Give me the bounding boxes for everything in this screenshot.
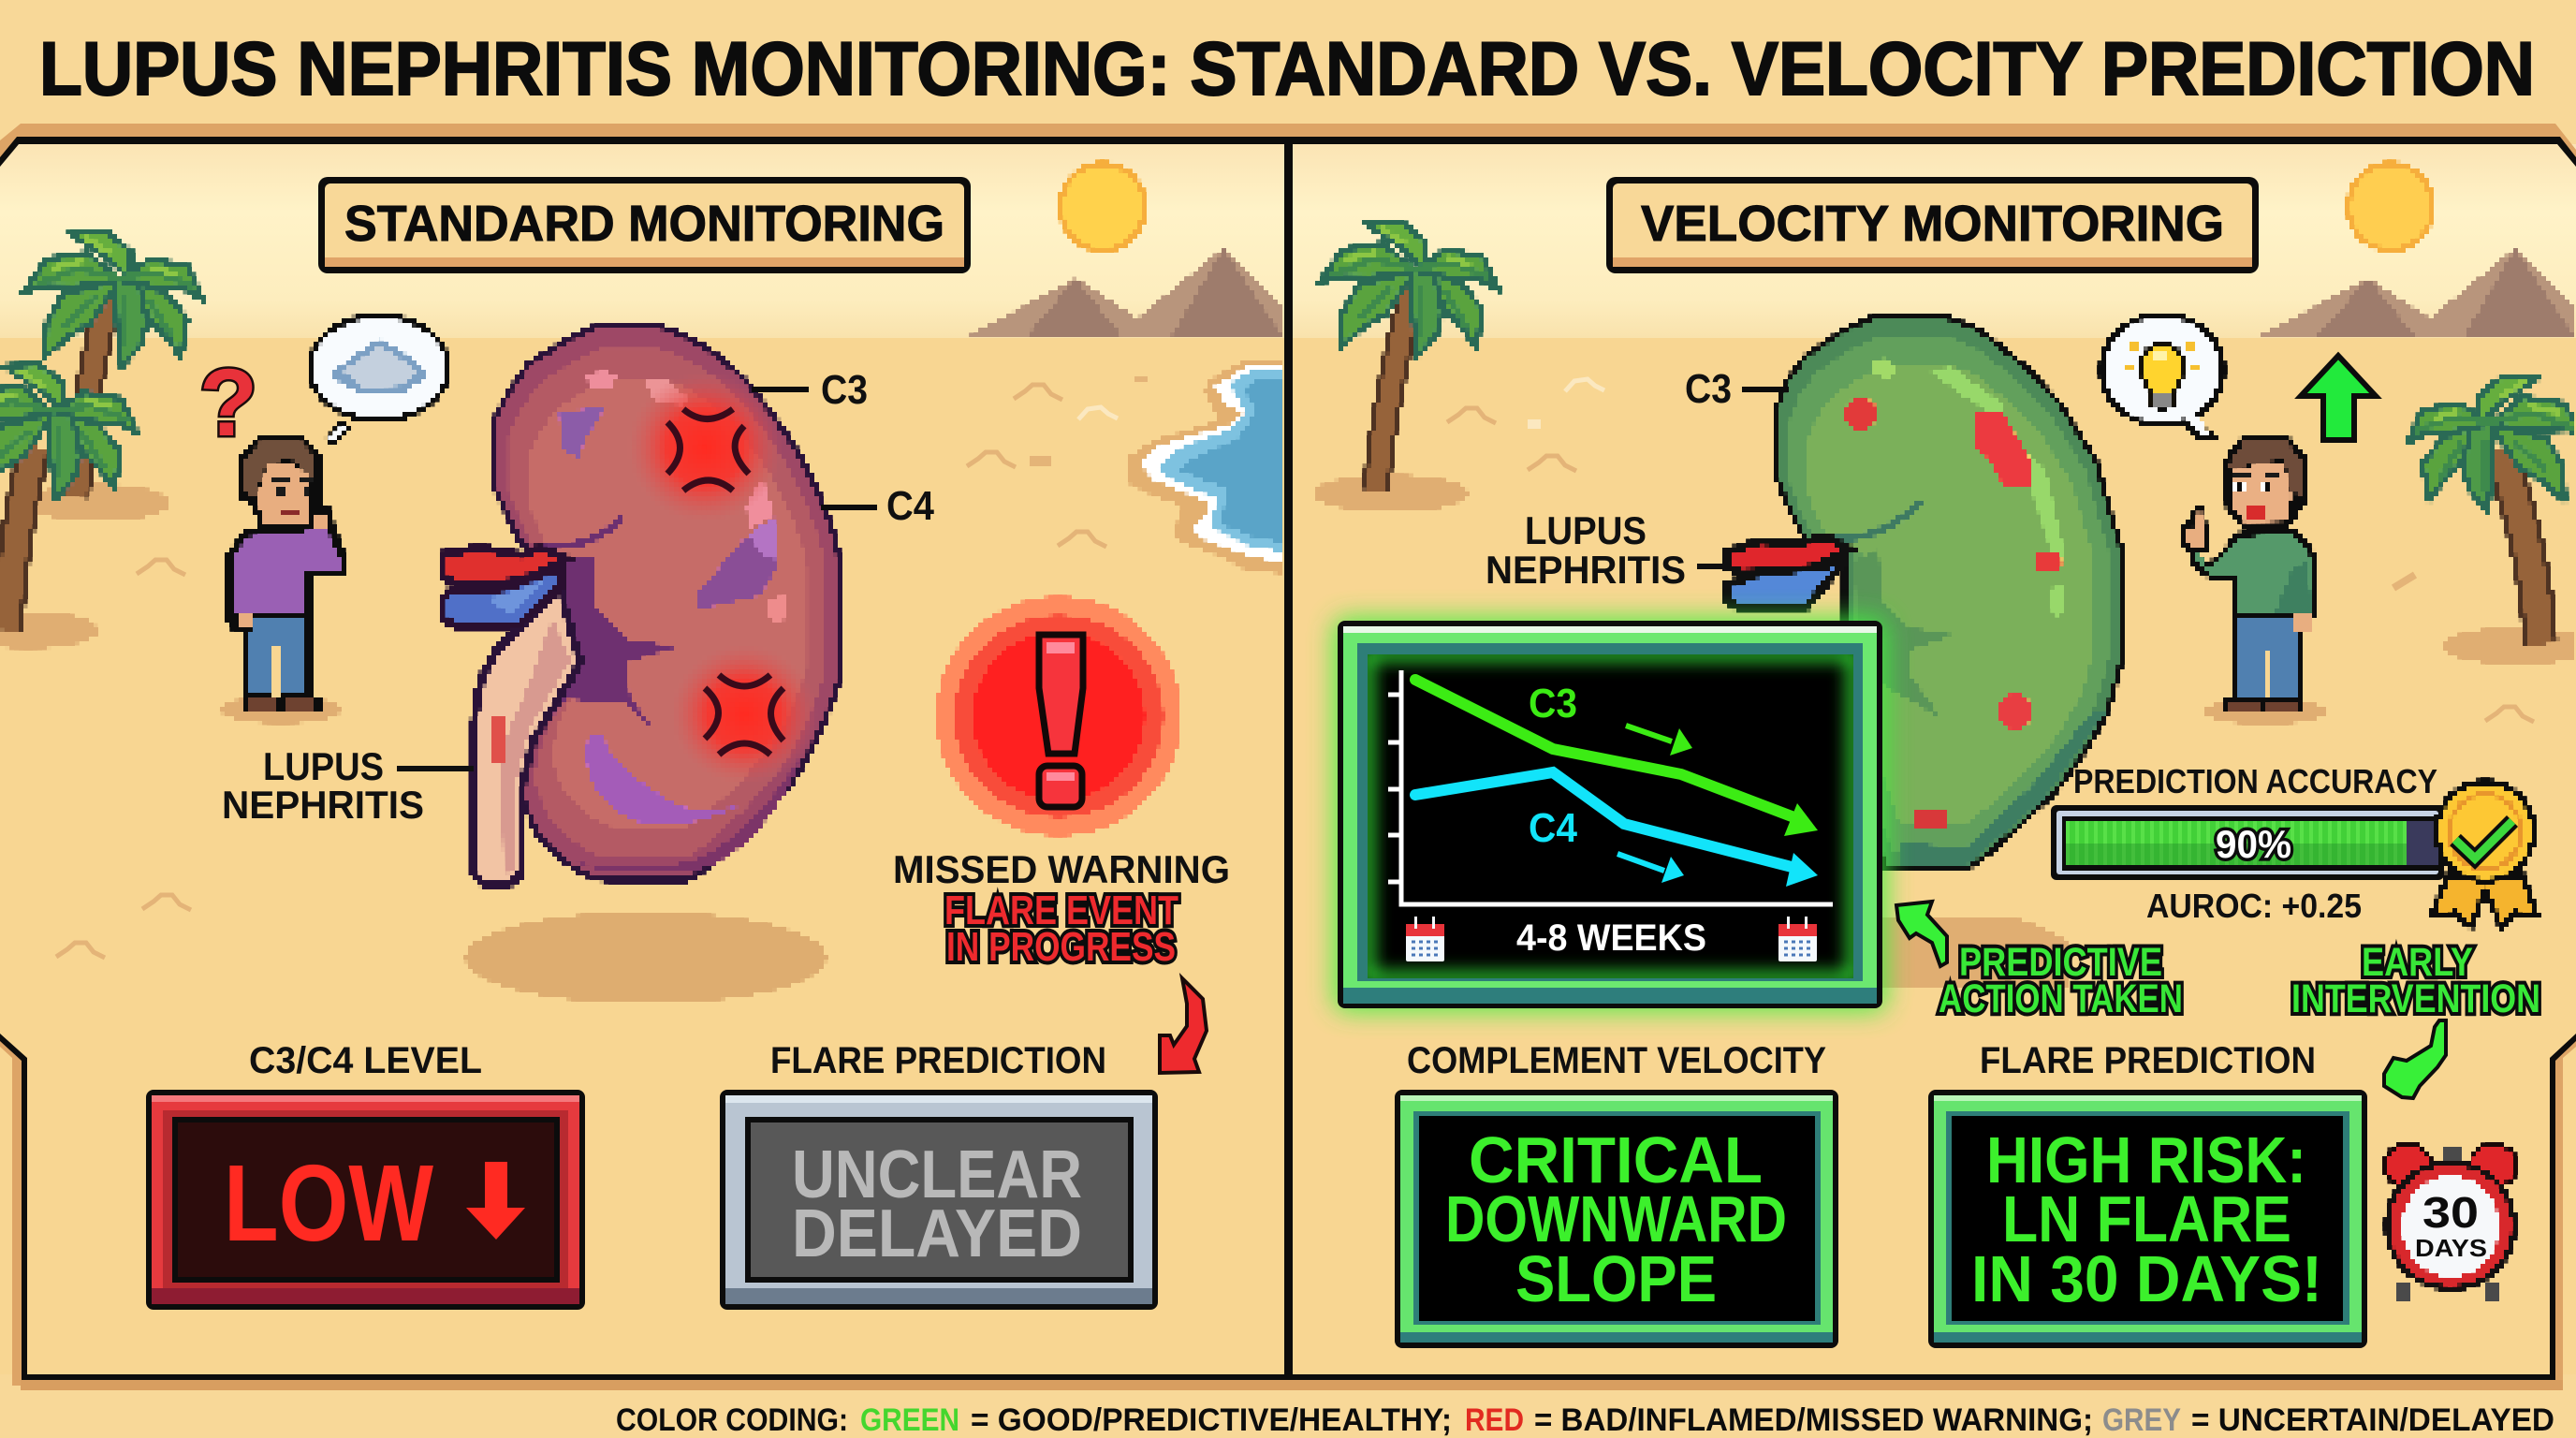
legend: color coding: GREY (2102, 1402, 2181, 1438)
status box: critical slope (1395, 1090, 1838, 1348)
kidney body (496, 330, 836, 877)
inflamed spot lower (671, 645, 817, 784)
callout: early intervention: EARLY (2362, 940, 2473, 985)
label: C3 (1685, 366, 1789, 412)
thought bubble (307, 313, 451, 446)
ground: velocity panel (1293, 338, 2576, 1374)
kidney shadow (465, 912, 827, 1004)
sky: velocity panel (1293, 144, 2576, 338)
label: C4 (821, 483, 934, 529)
callout: predictive action taken: PREDICTIVE (1959, 940, 2162, 985)
crease (1853, 548, 1954, 719)
vessels (443, 548, 568, 585)
icon: anger marks lower (705, 675, 783, 755)
icon: calendar start (1406, 917, 1444, 961)
purple crescent (586, 735, 739, 826)
kidney shadow (1881, 917, 2071, 988)
lesions (1844, 398, 1878, 430)
vessels (1727, 536, 1851, 573)
label: C3: C3 (821, 367, 868, 413)
status box: unclear (720, 1090, 1158, 1310)
heading: flare prediction: FLARE PREDICTION (1980, 1040, 2316, 1081)
prediction accuracy: PREDICTION ACCURACY (2073, 762, 2437, 800)
heading: complement velocity: COMPLEMENT VELOCITY (1407, 1040, 1826, 1081)
icon: warning (936, 596, 1181, 836)
icon: medal (2432, 779, 2537, 927)
icon: question mark: ? (199, 349, 257, 456)
label: lupus nephritis: LUPUS (263, 744, 384, 788)
panel: standard monitoring (0, 144, 1284, 1374)
palm tree: right (2407, 375, 2576, 665)
status box: critical slope: SLOPE (1515, 1242, 1717, 1315)
status box: low: LOW (224, 1142, 433, 1264)
icon: calendar end (1778, 917, 1817, 961)
ground: standard panel (0, 338, 1284, 1374)
kidney: healthy (1727, 318, 2118, 866)
mountains (2256, 248, 2576, 338)
in progress text: IN PROGRESS (946, 924, 1176, 970)
label: lupus nephritis: NEPHRITIS (1486, 548, 1686, 592)
label: lupus nephritis (1486, 508, 1727, 592)
monitor glow (1334, 618, 1886, 1011)
icon: alarm clock (2384, 1144, 2517, 1299)
label: C3: C3 (1685, 366, 1732, 412)
palm trees (0, 231, 203, 649)
mountains (965, 248, 1284, 338)
prediction accuracy (2051, 762, 2537, 927)
legend: color coding: COLOR CODING: (616, 1402, 848, 1438)
legend: color coding (616, 1402, 2554, 1438)
label: C4: C4 (1529, 805, 1577, 851)
label: C3 (752, 367, 868, 413)
arrow: predictive (1896, 902, 1947, 966)
person: pointing (2179, 435, 2326, 725)
status box: high risk: HIGH RISK: (1986, 1123, 2306, 1196)
icon: alarm clock: 30 (2422, 1188, 2479, 1237)
status box: critical slope: DOWNWARD (1445, 1182, 1787, 1255)
kidney body (1778, 318, 2118, 866)
callout: missed warning: MISSED WARNING (893, 847, 1230, 891)
status box: critical slope: CRITICAL (1469, 1123, 1763, 1196)
arrow: red (1160, 978, 1207, 1073)
legend: color coding: = GOOD/PREDICTIVE/HEALTHY; (971, 1402, 1452, 1438)
legend: color coding: GREEN (860, 1402, 959, 1438)
status box: unclear: DELAYED (792, 1196, 1082, 1271)
chart monitor (1334, 618, 1886, 1011)
icon: sun (2346, 161, 2436, 253)
section label: velocity monitoring (1606, 177, 2259, 273)
person: confused (220, 436, 348, 724)
label: lupus nephritis: NEPHRITIS (222, 783, 424, 827)
accuracy bar (2051, 805, 2444, 880)
status box: high risk: IN 30 DAYS! (1971, 1242, 2322, 1315)
legend: color coding: = UNCERTAIN/DELAYED (2191, 1402, 2554, 1438)
palm tree: left (1313, 222, 1499, 512)
heading: flare prediction: FLARE PREDICTION (770, 1040, 1106, 1081)
sand marks (1447, 379, 2534, 722)
kidney: inflamed (443, 330, 836, 885)
label: C3: C3 (1529, 681, 1577, 726)
highlights (1928, 367, 2003, 417)
arrow: C3 trend (1626, 726, 1692, 756)
flare event text: FLARE EVENT (944, 888, 1178, 933)
callout: predictive action taken (1939, 940, 2183, 1021)
callout: early intervention (2291, 940, 2540, 1021)
label: lupus nephritis (222, 744, 474, 827)
callout: missed warning (893, 847, 1230, 970)
callout: predictive action taken: ACTION TAKEN (1939, 976, 2183, 1021)
icon: anger marks upper (667, 409, 749, 491)
status box: unclear: UNCLEAR (792, 1137, 1082, 1212)
inflamed spot upper (628, 373, 782, 522)
status box: high risk (1928, 1090, 2367, 1348)
heading: C3/C4 level: C3/C4 LEVEL (249, 1040, 482, 1081)
ureter (475, 585, 580, 885)
arrow: C4 trend (1617, 854, 1684, 883)
arrow: intervention (2384, 1020, 2446, 1098)
sky: standard panel (0, 144, 1284, 338)
arrow: up (2301, 356, 2376, 440)
icon: sun (1058, 161, 1148, 253)
water (1126, 359, 1284, 574)
icon: alarm clock: DAYS (2415, 1234, 2487, 1262)
pelvis (527, 559, 681, 744)
sand marks (56, 376, 1148, 958)
panel: velocity monitoring (1293, 144, 2576, 1374)
auroc: AUROC: +0.25 (2146, 887, 2362, 925)
legend: color coding: RED (1465, 1402, 1524, 1438)
monitor bezel (1338, 621, 1882, 1008)
label: C4: C4 (886, 483, 934, 529)
section label: standard monitoring (318, 177, 971, 273)
legend: color coding: = BAD/INFLAMED/MISSED WARNING; (1534, 1402, 2093, 1438)
status box: high risk: LN FLARE (2002, 1182, 2291, 1255)
accuracy bar: 90% (2216, 822, 2291, 866)
label: lupus nephritis: LUPUS (1525, 508, 1647, 552)
lightbulb bubble (2099, 312, 2226, 441)
label: 4-8 weeks: 4-8 WEEKS (1516, 917, 1706, 959)
line: C3 (1415, 680, 1818, 836)
line: C4 (1415, 772, 1818, 887)
status box: low (146, 1090, 585, 1310)
section label: velocity monitoring: VELOCITY MONITORING (1641, 196, 2224, 252)
icon: down arrow (466, 1162, 525, 1240)
chart axes (1388, 670, 1833, 904)
section label: standard monitoring: STANDARD MONITORING (344, 196, 944, 252)
